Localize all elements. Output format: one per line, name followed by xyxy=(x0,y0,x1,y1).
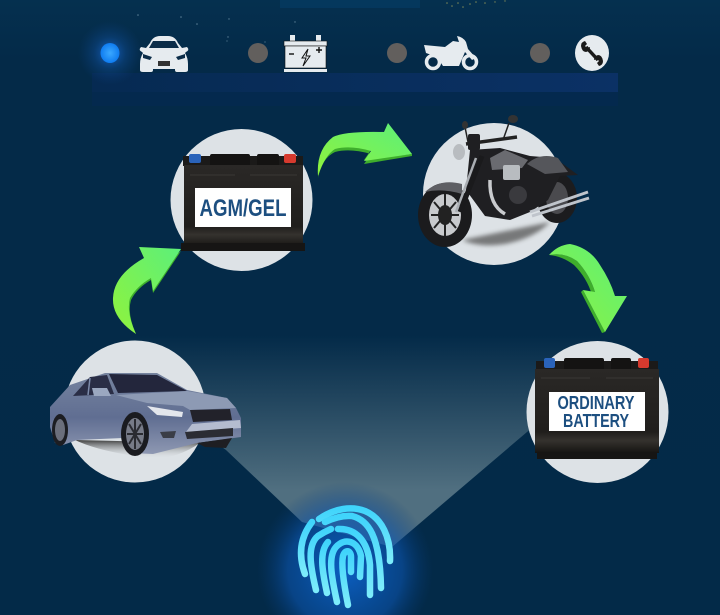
icon: wrench xyxy=(575,35,609,71)
motorcycle illustration xyxy=(418,115,589,247)
icon: car xyxy=(140,36,188,72)
panel: ordinary battery circle xyxy=(526,341,668,483)
battery illustration xyxy=(181,154,305,251)
active indicator dot xyxy=(78,21,142,85)
panel: motorcycle circle xyxy=(418,115,589,265)
battery illustration xyxy=(535,358,659,459)
icon: fingerprint xyxy=(301,508,390,605)
label: ORDINARY BATTERY xyxy=(549,392,645,431)
inactive dot xyxy=(387,43,407,63)
inactive dot xyxy=(530,43,550,63)
inactive dot xyxy=(248,43,268,63)
arrow: car to AGM/GEL xyxy=(113,247,181,334)
arrow: AGM/GEL to motorcycle xyxy=(318,123,412,178)
label: ORDINARY BATTERY: ORDINARY xyxy=(558,393,634,413)
icon: motorcycle xyxy=(424,36,476,68)
motorcycle shadow xyxy=(462,222,550,245)
label: ORDINARY BATTERY: BATTERY xyxy=(563,411,629,431)
arrow: motorcycle to ordinary battery xyxy=(549,244,627,333)
label: AGM/GEL: AGM/GEL xyxy=(200,195,286,222)
panel: car circle xyxy=(50,340,241,482)
car illustration xyxy=(50,373,241,456)
fingerprint light beam xyxy=(130,335,600,547)
navigation band xyxy=(92,73,618,92)
fingerprint glow xyxy=(257,482,433,615)
car shadow xyxy=(75,440,200,458)
panel: AGM/GEL battery circle xyxy=(170,129,312,271)
mode selector icon row xyxy=(78,21,609,85)
icon: battery xyxy=(284,35,327,72)
